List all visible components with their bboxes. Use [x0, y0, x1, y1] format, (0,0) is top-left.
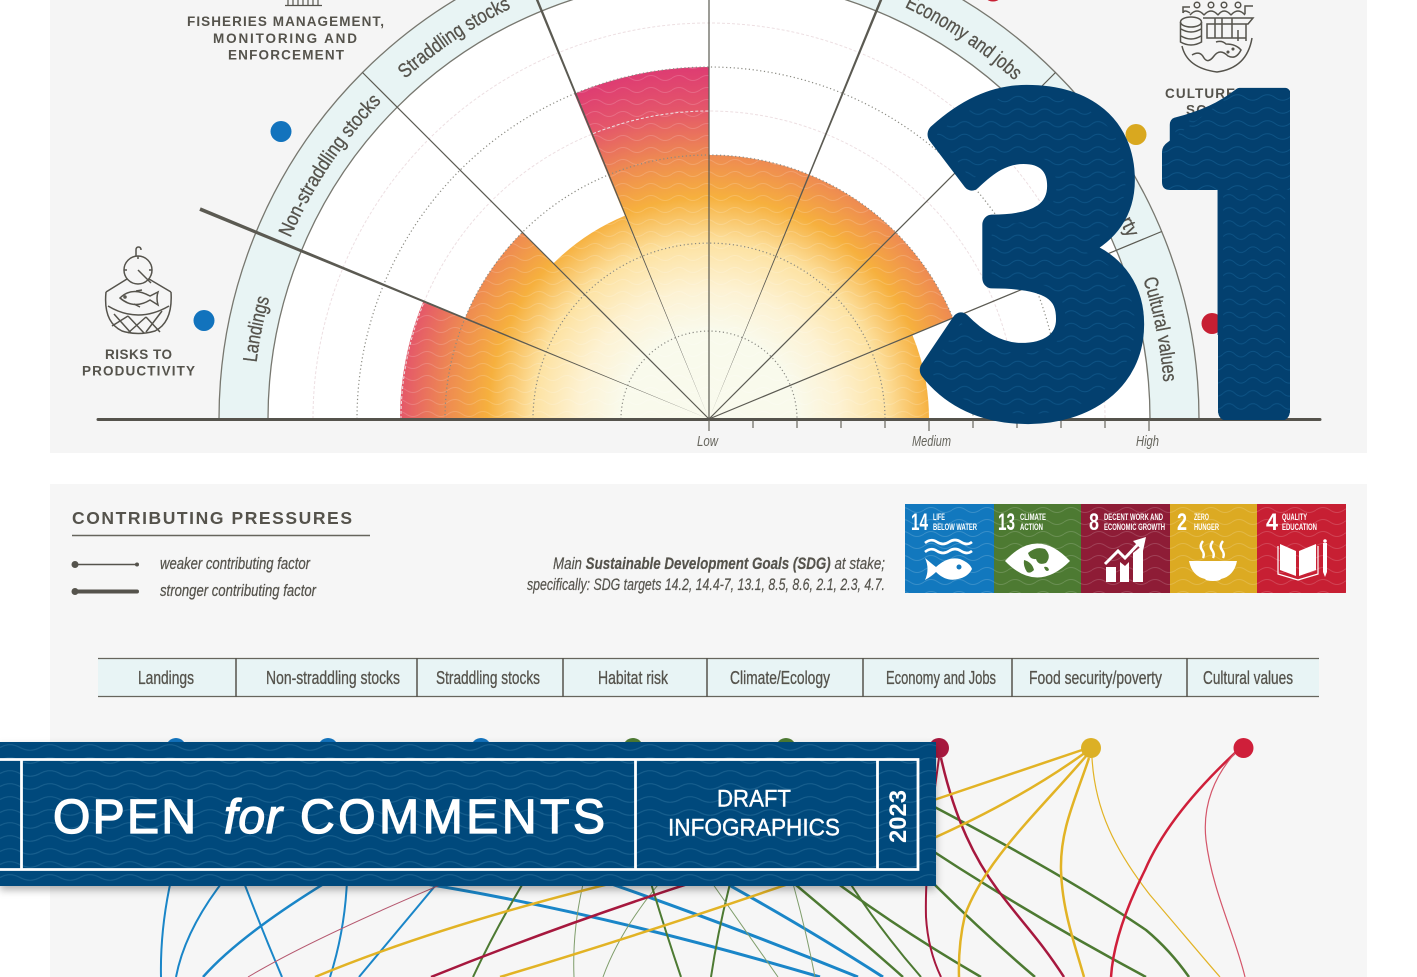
header labels: Landings	[138, 668, 194, 688]
icon: fish in a net with clock	[106, 247, 171, 334]
SDG tile 13: climate action: CLIMATE	[1020, 512, 1046, 522]
banner year: 2023	[885, 790, 912, 843]
banner title: OPEN	[53, 791, 196, 844]
banner subtitle: DRAFT	[717, 786, 791, 812]
legend: stronger contributing factor	[72, 581, 317, 600]
chart: baseline axis	[98, 418, 1320, 421]
chart: ring sector labels: Cultural values	[1144, 277, 1176, 382]
header labels	[138, 668, 1293, 688]
header labels: Food security/poverty	[1029, 668, 1162, 688]
network: green links	[473, 802, 1189, 977]
banner frame	[0, 760, 918, 870]
header labels: Straddling stocks	[436, 668, 540, 688]
banner subtitle	[668, 786, 840, 842]
banner title: COMMENTS	[300, 791, 605, 844]
semicircular risk chart	[96, 0, 1322, 450]
heading: risks to productivity	[82, 347, 195, 378]
SDG tile 8: decent work and economic growth: 8	[1089, 509, 1099, 536]
network: blue links	[161, 880, 883, 977]
SDG tile 8: decent work and economic growth	[1081, 504, 1170, 593]
SDG tile 4: quality education: QUALITY	[1282, 512, 1307, 522]
SDG tile 2: zero hunger: ZERO	[1194, 512, 1209, 522]
heading: culture and society: CULTURE AND	[1165, 86, 1272, 101]
legend: weaker contributing factor: weaker contributing factor	[160, 554, 311, 573]
SDG tile 14: life below water: LIFE	[933, 512, 945, 522]
SDG tile 2: zero hunger	[1170, 504, 1257, 593]
chart: faint level arcs	[313, 23, 1105, 419]
legend: weaker contributing factor	[72, 554, 311, 573]
SDG tile 2: zero hunger: HUNGER	[1194, 522, 1219, 532]
legend: stronger contributing factor: stronger contributing factor	[160, 581, 317, 600]
chart: axis labels: Medium	[912, 433, 951, 450]
panel: contributing pressures background	[50, 484, 1367, 977]
heading: fisheries management: FISHERIES MANAGEMENT,	[187, 14, 384, 29]
chart: ring sector labels: Landings	[242, 296, 270, 362]
banner title	[53, 791, 605, 844]
chart: ring sector labels: Non-straddling stocks	[278, 96, 380, 237]
SDG tile 13: climate action: ACTION	[1020, 522, 1043, 532]
chart: dotted risk level arcs	[357, 67, 1061, 419]
SDG tile 4: quality education: EDUCATION	[1282, 522, 1317, 532]
banner: open for comments draft infographics 2023	[0, 742, 936, 886]
SDG tiles	[905, 504, 1346, 593]
heading: culture and society	[1165, 86, 1272, 118]
text: sustainable development goals at stake: Main Sustainable Development Goals (SDG) at stake;	[553, 554, 885, 573]
network: nodes	[166, 738, 1254, 758]
panel: risk chart background	[50, 0, 1367, 453]
category dots around chart	[194, 0, 1222, 334]
SDG tile 14: life below water: BELOW WATER	[933, 522, 977, 532]
chart: wave texture on sectors	[400, 67, 953, 419]
SDG tile 4: quality education	[1257, 504, 1346, 593]
header labels: Cultural values	[1203, 668, 1293, 688]
network: yellow links	[315, 749, 1220, 977]
banner subtitle: INFOGRAPHICS	[668, 814, 840, 842]
big page number 31	[920, 84, 1290, 424]
SDG tile 8: decent work and economic growth: DECENT WORK AND	[1104, 512, 1163, 522]
chart: axis labels	[697, 433, 1159, 450]
banner title: for	[224, 791, 284, 844]
SDG tile 14: life below water	[905, 504, 994, 593]
chart: axis labels: High	[1136, 433, 1159, 450]
SDG tile 13: climate action: 13	[998, 509, 1015, 536]
header labels: Habitat risk	[598, 668, 669, 688]
network: red links	[1111, 752, 1245, 977]
SDG tile 13: climate action	[994, 504, 1081, 593]
numeral one flag block	[1162, 88, 1290, 190]
SDG tile 14: life below water: 14	[911, 509, 928, 536]
chart: ring sector labels	[242, 0, 1176, 382]
icon: fisheries management fragment	[285, 0, 322, 6]
chart: sector spokes	[199, 0, 1162, 419]
heading: fisheries management: MONITORING AND	[213, 31, 357, 46]
heading: contributing pressures: CONTRIBUTING PRESSURES	[72, 508, 352, 528]
heading: culture and society: SOCIETY	[1186, 102, 1253, 118]
chart: risk sectors with heat gradient	[400, 67, 953, 419]
SDG tile 8: decent work and economic growth: ECONOMIC GROWTH	[1104, 522, 1165, 532]
SDG tile 2: zero hunger: 2	[1177, 509, 1187, 536]
network: dark red links	[248, 758, 1064, 977]
header labels: Climate/Ecology	[730, 668, 830, 688]
chart: ring sector labels: Food security/poverty	[1120, 216, 1138, 235]
header labels: Non-straddling stocks	[266, 668, 400, 688]
heading: risks to productivity: PRODUCTIVITY	[82, 364, 195, 378]
text: sustainable development goals at stake	[527, 554, 885, 594]
heading: risks to productivity: RISKS TO	[105, 347, 172, 362]
SDG tile 4: quality education: 4	[1266, 509, 1279, 536]
heading: fisheries management: ENFORCEMENT	[228, 48, 345, 62]
heading: fisheries management	[187, 14, 384, 62]
chart: white disc and label ring	[219, 0, 1199, 419]
chart: axis ticks	[709, 420, 1149, 431]
table header: pressure categories	[98, 658, 1319, 697]
text: sustainable development goals at stake: specifically: SDG targets 14.2, 14.4-7, 13.1, 8.5, 8.6, 2.1, 2.3, 4.7.	[527, 575, 885, 594]
chart: axis labels: Low	[697, 433, 719, 450]
icon: culture and society	[1180, 2, 1253, 72]
header labels: Economy and Jobs	[886, 668, 996, 688]
